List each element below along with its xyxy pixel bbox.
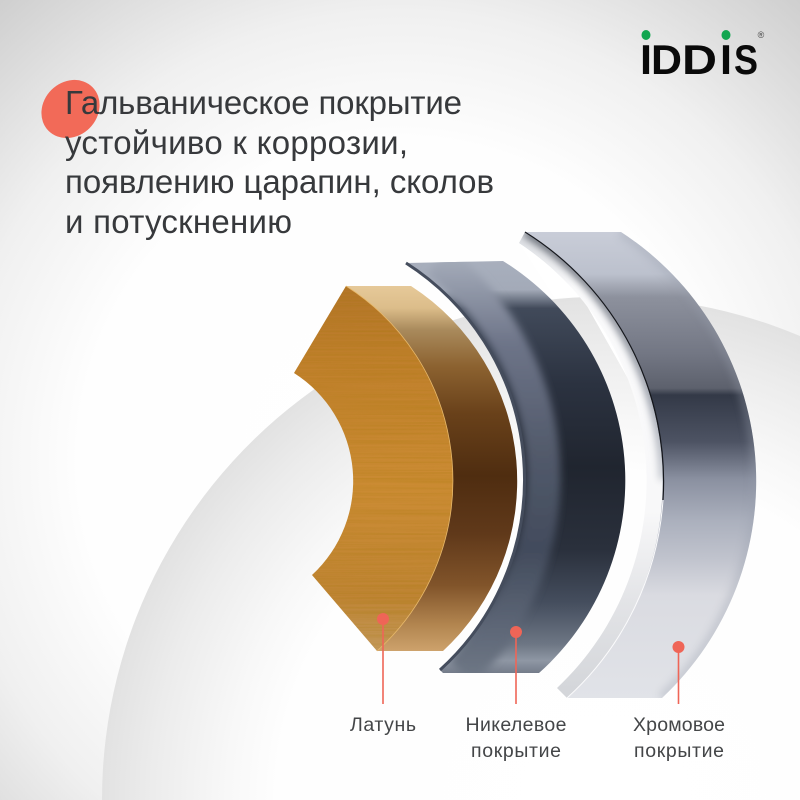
heading: [65, 84, 494, 240]
brass face: [294, 286, 453, 651]
accent blob behind heading: [29, 68, 112, 150]
chrome dark edge: [525, 232, 664, 500]
heading: устойчиво к коррозии,: [65, 124, 408, 161]
logo: IDDIS: [640, 30, 765, 83]
label: nickel: Никелевое: [466, 714, 566, 736]
marker: nickel: [510, 626, 522, 704]
chrome side sheen: [621, 232, 756, 698]
marker: brass: [377, 613, 389, 704]
label: nickel: [466, 714, 566, 762]
label: chrome: [633, 714, 725, 762]
logo: IDDIS: ®: [758, 30, 765, 40]
background disc: [102, 297, 800, 800]
label: nickel: покрытие: [471, 740, 561, 762]
chrome bevel shadow: [525, 232, 663, 480]
brass side: [346, 286, 517, 651]
logo: IDDIS: S: [734, 36, 758, 83]
label: chrome: покрытие: [634, 740, 724, 762]
marker: chrome: [672, 641, 684, 704]
heading: и потускнению: [65, 203, 292, 240]
label: brass: Латунь: [350, 714, 416, 736]
white backing behind chrome plate: [519, 240, 650, 400]
heading: появлению царапин, сколов: [65, 163, 494, 200]
brass layer: [290, 280, 517, 655]
logo: IDDIS: D: [651, 36, 682, 83]
chrome light edge: [567, 500, 663, 698]
nickel inner lighter band: [438, 261, 543, 673]
chrome layer: [519, 232, 756, 698]
logo: IDDIS: D: [682, 36, 717, 83]
logo: IDDIS: I: [640, 36, 652, 83]
logo: IDDIS: I: [720, 36, 732, 83]
label: chrome: Хромовое: [633, 714, 725, 736]
heading: Гальваническое покрытие: [65, 84, 462, 121]
nickel layer: [406, 261, 625, 673]
chrome bevel: [519, 232, 663, 698]
